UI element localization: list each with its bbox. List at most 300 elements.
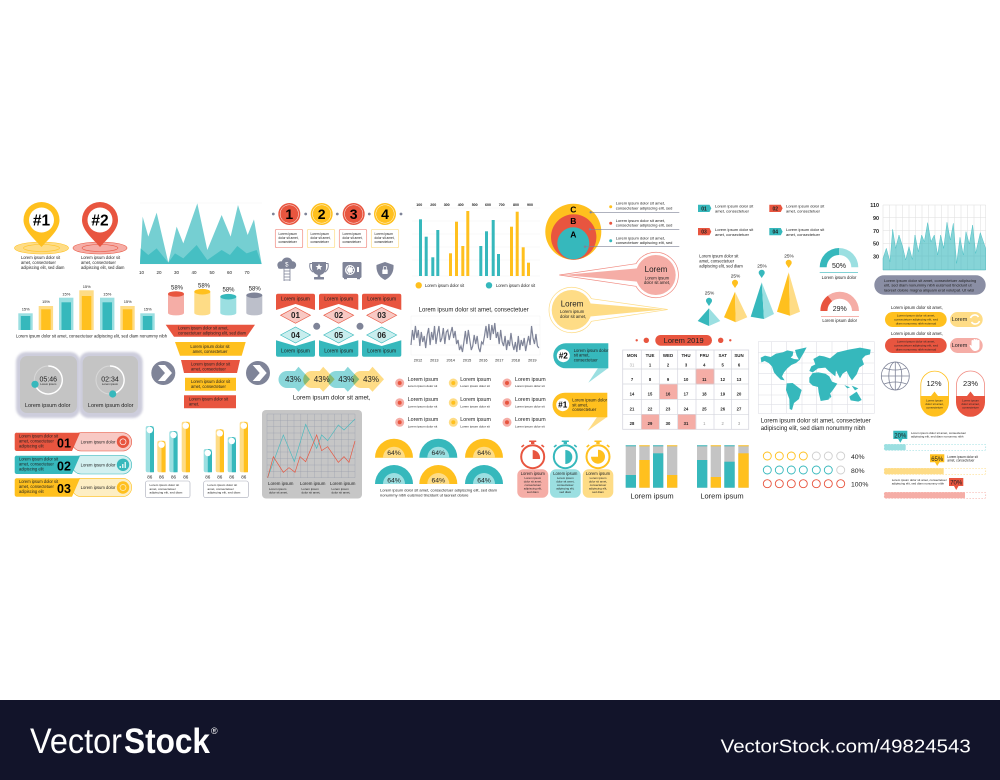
noisy line chart with years: 2012 [414,358,422,362]
thermometer bars group 1: adipiscing elit, sed diam [150,491,183,495]
red header cards: Lorem ipsum [281,296,310,302]
numbered tags 01 to 04: Lorem ipsum dolor sit [715,227,754,232]
half gauges 64 percent: Lorem ipsum dolor sit amet, consectetuer adipiscing elit, sed diam [380,488,498,492]
overlapping arrows 43 percent: 43% [363,375,379,384]
calendar: 14 [630,392,635,396]
area chart 30 to 110: 70 [873,229,879,235]
clock panel 02:34 [79,352,143,418]
half ring gauge 50 percent: Lorem ipsum dolor [822,275,857,280]
gray panel line chart: dolor sit amet, [269,490,288,494]
stopwatch red: Lorem ipsum [524,476,542,480]
numbered text boxes: dolor sit amet, [278,236,299,240]
pin captions: adipiscing elit, sed diam [21,265,65,270]
capsule 23 percent: dolor sit amet, [961,402,980,406]
calendar: 6 [738,362,741,367]
calendar: 26 [720,406,726,412]
noisy line chart with years: 2016 [479,358,488,362]
thermometer bars group 2: Lorem ipsum dolor sit [208,483,237,487]
funnel steps: amet, consectetuer [191,366,226,372]
yellow info pills: Lorem ipsum dolor sit amet, [897,314,935,318]
gray panel line chart: Lorem ipsum [268,481,294,486]
noisy line chart with years: 2014 [446,358,455,362]
speech callout #2 [553,343,609,383]
pyramid chart 25 percent: 25% [705,290,715,296]
stopwatch red: Lorem ipsum [521,471,545,476]
cylinders 58 percent [168,284,262,315]
gray text pill: laoreet dolore magna aliquam erat volutpat. Ut wisi [884,287,974,292]
clock panel 02:34: Lorem ipsum [102,382,119,386]
stacked bars group 2 [697,445,749,500]
progress bar 70 percent [884,478,986,498]
gray panel line chart: dolor sit amet, [302,490,321,494]
list row 02: Lorem ipsum dolor sit [19,456,59,462]
diamond flow 01 to 06: 05 [334,331,344,340]
progress bar 65 percent: amet, consectetuer [947,458,975,462]
yellow balloon callout: dolor sit amet, [560,314,586,319]
world map: Lorem ipsum dolor sit amet, consectetuer [761,418,871,424]
bar chart: 15 percent bars [16,284,168,338]
stopwatch red: sed diam [527,490,539,494]
numbered circles 1 to 4: 2 [318,206,326,222]
numbered circles 1 to 4: 1 [285,206,293,222]
numbered text boxes: dolor sit amet, [374,236,395,240]
bullet list grid: Lorem ipsum dolor sit [515,424,545,428]
bar chart: 15 percent bars: 15% [144,307,152,312]
vertical bar chart 100 to 900: Lorem ipsum dolor sit [425,283,465,288]
funnel steps: Lorem ipsum dolor sit [189,396,229,402]
progress bar 65 percent: Lorem ipsum dolor sit [947,455,978,459]
stopwatch teal: consectetuer [557,483,574,487]
yellow balloon callout: Lorem [561,300,584,308]
capsule 12 percent: consectetuer [926,406,943,410]
capsule 12 percent: dolor sit amet, [925,402,944,406]
bullet list grid: Lorem ipsum [460,397,492,403]
calendar: 30 [666,421,671,426]
calendar: 29 [648,421,653,426]
noisy line chart with years: 2018 [511,358,520,362]
calendar: FRU [700,353,709,358]
vertical bar chart 100 to 900: 300 [444,203,450,207]
nested circles A B C with leaders: Lorem ipsum dolor sit amet, [616,235,665,240]
vertical bar chart 100 to 900: Lorem ipsum dolor sit [496,283,536,288]
pink balloon callout: Lorem [645,265,668,274]
progress bar 70 percent: Lorem ipsum dolor sit amet, consectetuer [892,478,947,482]
world map [758,342,874,432]
thermometer bars group 1: 86 [147,474,153,480]
funnel steps: amet, consectetuer [193,349,228,354]
arrow button 2 [246,361,270,385]
list row 03: amet, consectetuer [19,484,54,489]
yellow info pills: Lorem ipsum dolor sit amet, [891,305,943,310]
clock panel 02:34: Lorem ipsum dolor [88,403,134,409]
red info pills: Lorem [952,343,968,349]
speech callout #1: #1 [558,401,568,410]
capsule 23 percent [956,371,985,417]
vertical bar chart 100 to 900: 600 [485,203,491,207]
calendar: TUE [646,353,654,358]
pyramid chart 25 percent: 25% [731,274,741,280]
calendar: 7 [631,377,634,382]
bar chart: 15 percent bars: 15% [103,292,112,296]
red info pills: diam nonummy nibh euismod [896,347,936,351]
logo wordmark: Stock [124,722,210,761]
pyramid chart 25 percent: 25% [784,254,795,260]
gray panel line chart: Lorem ipsum [332,487,349,491]
pyramid chart 25 percent: 25% [757,264,768,270]
thermometer bars group 1: amet, consectetuer [150,487,176,491]
diamonds [280,307,397,343]
bullet list grid: Lorem ipsum [408,377,439,383]
area chart 30 to 110: 90 [873,216,879,222]
clock panel 02:34: 02:34 [101,376,119,384]
vertical bar chart 100 to 900: 200 [430,203,436,207]
speech callout #1 [553,393,608,431]
diamond flow 01 to 06: 01 [291,311,300,320]
stopwatch yellow [583,440,613,498]
area chart: teal peaks: 30 [174,270,179,275]
calendar: 2 [667,362,670,367]
pyramid chart 25 percent: adipiscing elit, sed diam [699,264,743,268]
calendar: 11 [702,377,707,382]
numbered tags 01 to 04: amet, consectetuer [786,232,821,237]
vertical bar chart 100 to 900: 800 [513,203,519,207]
numbered tags 01 to 04: amet, consectetuer [715,208,750,214]
clock panel 05:46: 05:46 [40,376,57,384]
calendar: 1 [649,362,652,367]
cylinders 58 percent: 58% [171,285,184,291]
yellow info pills: diam nonummy nibh euismod [896,321,936,325]
numbered tags 01 to 04: 03 [701,230,707,236]
thermometer bars group 1: 86 [183,474,189,480]
icon: safe [342,262,362,279]
location pin #2 [73,202,127,254]
noisy line chart with years: 2017 [495,358,504,362]
calendar [623,335,749,429]
list row 01: Lorem ipsum dolor sit [19,434,59,438]
progress bar 70 percent: adipiscing elit, sed diam nonummy nibh [892,482,944,486]
calendar: 13 [737,377,742,382]
ring rating rows: 100% [851,482,868,488]
yellow info pills: consectetuer adipiscing elit, sed [894,318,938,322]
thermometer bars group 2: 86 [217,474,223,480]
list row 02: amet, consectetuer [19,462,54,466]
stopwatch teal: Lorem ipsum [553,471,578,476]
list row 01: Lorem ipsum dolor [81,440,116,444]
speech callout #1: Lorem ipsum dolor [572,398,608,403]
yellow balloon callout [549,287,668,333]
nested circles A B C with leaders: consectetuer adipiscing elit, sed [616,222,672,228]
stopwatch teal: Lorem ipsum [557,476,574,480]
pin captions: Lorem ipsum dolor sit [21,255,61,260]
calendar: 3 [738,421,741,426]
numbered text boxes: Lorem ipsum [278,232,297,236]
half ring gauge 50 percent [820,248,858,280]
calendar title pill: Lorem 2019 [664,336,704,345]
pyramid chart 25 percent [698,254,800,326]
vertical bar chart 100 to 900: 700 [499,203,505,207]
pin captions: Lorem ipsum dolor sit [81,255,121,260]
numbered circles 1 to 4: 4 [381,206,389,222]
stopwatch teal [550,440,581,498]
stopwatch red: dolor sit amet, [524,480,542,484]
calendar: 12 [720,377,726,382]
progress bar 20 percent: 20% [894,433,907,439]
stopwatch yellow: Lorem ipsum [590,476,607,480]
calendar: 25 [702,406,707,412]
calendar: SUN [734,353,744,358]
list row 02: Lorem ipsum dolor [81,462,116,468]
calendar: 18 [702,392,707,396]
bullet list grid: Lorem ipsum dolor sit [408,384,437,388]
ring rating rows: 40% [851,454,865,461]
half gauges 64 percent: 64% [387,450,401,457]
bullet list grid: Lorem ipsum [408,417,439,423]
diamond flow 01 to 06: 02 [334,311,344,320]
list row 02 [15,456,132,474]
gray text pill [874,275,986,295]
pin captions: adipiscing elit, sed diam [81,265,125,270]
vertical bar chart 100 to 900 [412,203,540,288]
stopwatch yellow: consectetuer [590,483,606,487]
cylinders 58 percent: 58% [249,286,261,292]
teal footer cards: Lorem ipsum [324,348,353,354]
nested circles A B C with leaders: Lorem ipsum dolor sit amet, [616,200,665,206]
half gauges 64 percent: 64% [477,477,491,484]
stopwatch cards [517,440,613,498]
noisy line chart with years: 2013 [430,358,439,362]
logo wordmark [30,722,218,761]
stopwatch yellow: dolor sit amet, [589,480,607,484]
noisy line chart with years [411,308,540,362]
list row 03: 03 [57,482,71,496]
speech callout #1: sit amet, [572,402,588,407]
calendar: 10 [684,377,689,382]
nested circles A B C with leaders [545,200,679,260]
teal footer cards: Lorem ipsum [367,348,396,354]
bullet list grid: Lorem ipsum [515,377,546,383]
bar chart: 15 percent bars: 15% [22,307,30,312]
nested circles A B C with leaders: Lorem ipsum dolor sit amet, [616,218,665,223]
bullet list grid: Lorem ipsum dolor sit [515,405,545,409]
pyramid chart 25 percent: Lorem ipsum dolor sit [699,254,739,258]
footer image id: VectorStock.com/49824543 [721,736,971,756]
arrow button 1 [151,361,175,385]
progress bar 20 percent: Lorem ipsum dolor sit amet, consectetuer [911,431,966,435]
stopwatch yellow: Lorem ipsum [586,471,611,476]
bar chart: 15 percent bars: Lorem ipsum dolor sit amet, consectetuer adipiscing elit, sed diam nonummy nibh [16,334,168,338]
list row 03 [15,478,132,497]
numbered text boxes: dolor sit amet, [342,236,363,240]
icon: trophy [310,262,328,280]
gray panel line chart: Lorem ipsum [330,481,356,486]
half gauges 64 percent: 64% [387,477,401,484]
calendar: 24 [684,406,689,412]
numbered text boxes: Lorem ipsum [310,232,329,236]
half gauges 64 percent: nonummy nibh euismod tincidunt ut laoreet dolore [380,492,469,497]
clock panel 05:46 [16,352,80,418]
numbered tags 01 to 04: amet, consectetuer [715,232,750,237]
gray panel line chart: dolor sit amet, [332,490,351,494]
red info pills [885,331,983,353]
calendar: 20 [737,392,742,396]
bullet list grid: Lorem ipsum [515,417,546,423]
list row 03: Lorem ipsum dolor sit [19,479,59,484]
world map: adipiscing elit, sed diam nonummy nibh [761,426,865,432]
list row 01: amet, consectetuer [19,438,54,444]
speech callout #2: sit amet, [574,353,590,358]
clock panel 05:46: Lorem ipsum [40,382,57,386]
icon: money cloud with ladder: $ [285,262,289,268]
red header cards [276,294,401,310]
thermometer bars group 1: Lorem ipsum dolor sit [150,483,179,487]
numbered text boxes: consectetuer [310,240,330,244]
list row 02: adipiscing elit [19,466,44,472]
progress bar 65 percent: 65% [931,457,944,463]
stopwatch red [517,440,548,498]
numbered tags 01 to 04: Lorem ipsum dolor sit [786,204,825,208]
area chart 30 to 110: 110 [870,203,879,209]
capsule 23 percent: Lorem ipsum [962,398,979,402]
bullet list grid: Lorem ipsum dolor sit [460,384,490,388]
pin captions: amet, consectetuer [81,260,116,265]
thermometer bars group 2 [204,422,248,498]
calendar: 4 [703,362,706,367]
nested circles A B C with leaders: A [570,230,576,240]
numbered text boxes: dolor sit amet, [310,236,331,240]
area chart: teal peaks: 70 [244,270,250,275]
calendar: 1 [703,421,706,426]
logo wordmark: Vector [30,722,122,761]
half ring gauge 29 percent: 29% [833,306,847,313]
thermometer bars group 1: 86 [171,474,176,480]
numbered text boxes: consectetuer [278,240,298,244]
area chart: teal peaks: 50 [209,270,215,275]
gray panel line chart [262,410,362,498]
area chart 30 to 110: 30 [873,254,879,260]
calendar: 27 [737,406,742,412]
list row 01 [15,433,132,451]
gray text pill: elit, sed diam nonummy nibh euismod tincidunt ut [884,283,972,288]
diamond flow 01 to 06 [276,294,401,357]
pink balloon callout: dolor sit amet, [644,280,670,285]
footer banner [0,700,1000,780]
overlapping arrows 43 percent: 43% [338,375,354,384]
pin captions: amet, consectetuer [21,260,56,265]
logo wordmark: ® [211,726,218,736]
numbered circles 1 to 4: 3 [350,206,358,222]
overlapping arrows 43 percent [278,367,384,402]
thermometer bars group 2: 86 [205,474,211,480]
capsule 23 percent: 23% [963,379,978,388]
half gauges 64 percent [375,439,503,497]
half gauges 64 percent: 64% [431,477,445,484]
capsule 23 percent: consectetuer [962,406,979,410]
area chart: teal peaks [139,203,262,275]
bullet list grid: Lorem ipsum dolor sit [408,424,437,428]
calendar: 3 [685,362,688,367]
stacked bars group 1: Lorem ipsum [630,491,674,500]
clock panel 05:46: Lorem ipsum dolor [25,403,71,409]
speech callout #2: consectetuer [574,357,598,362]
nested circles A B C with leaders: consectetuer adipiscing elit, sed [616,240,672,245]
capsule 12 percent: 12% [926,379,942,388]
stacked bars group 1 [626,445,677,500]
noisy line chart with years: 2015 [463,358,471,362]
yellow balloon callout: Lorem ipsum [560,309,585,314]
thermometer bars group 1: 86 [159,474,164,480]
numbered text boxes: Lorem ipsum [342,232,361,236]
bar chart: 15 percent bars: 15% [83,284,91,289]
vertical bar chart 100 to 900: 400 [458,203,464,207]
pin captions [21,255,125,270]
numbered tags 01 to 04: Lorem ipsum dolor sit [715,204,754,208]
yellow info pills: Lorem [952,317,968,323]
overlapping arrows 43 percent: 43% [285,375,301,384]
calendar: MON [627,353,637,358]
speech callout #2: #2 [559,352,568,361]
stopwatch red: adipiscing elit, [524,486,542,490]
half gauges 64 percent: 64% [431,450,445,457]
diamond flow 01 to 06: 06 [377,331,387,340]
bullet list grid: Lorem ipsum dolor sit [460,424,490,428]
calendar: 2 [722,421,725,426]
numbered tags 01 to 04: 01 [701,206,707,212]
progress bar 65 percent [884,454,986,474]
funnel steps: Lorem ipsum dolor sit [191,362,231,366]
teal footer cards: Lorem ipsum [281,348,310,354]
numbered text boxes: consectetuer [374,240,394,244]
bullet list grid: Lorem ipsum dolor sit [408,405,437,409]
numbered tags 01 to 04 [698,204,825,237]
area chart: teal peaks: 10 [139,270,144,275]
funnel steps: Lorem ipsum dolor sit [190,344,230,349]
location pin #1 [14,202,68,254]
red header cards: Lorem ipsum [324,296,353,302]
nested circles A B C with leaders: B [570,216,576,226]
red info pills: Lorem ipsum dolor sit amet, [897,340,935,344]
funnel steps: Lorem ipsum dolor sit amet, [178,326,229,331]
funnel steps: amet. [189,402,199,406]
teal footer cards [276,340,401,357]
thermometer bars group 2: 86 [229,474,235,480]
thermometer bars group 2: 86 [241,474,247,480]
bar chart: 15 percent bars: 15% [124,299,132,304]
calendar: 5 [722,362,725,367]
half gauges 64 percent: 64% [477,450,491,457]
pyramid chart 25 percent: amet, consectetuer [699,258,735,264]
vertical bar chart 100 to 900: 900 [527,203,533,207]
area chart: teal peaks: 40 [191,270,197,275]
icon: money cloud with ladder [277,258,296,281]
calendar: 21 [630,406,635,412]
capsule 12 percent: Lorem ipsum [926,398,943,402]
noisy line chart with years: Lorem ipsum dolor sit amet, consectetuer [419,308,529,314]
stopwatch teal: dolor sit amet, [556,480,575,484]
list row 02: 02 [57,460,71,474]
progress bar 20 percent [884,431,986,450]
calendar: WED [663,353,673,358]
numbered text boxes: consectetuer [342,240,362,244]
bar chart: 15 percent bars: 15% [42,299,50,304]
calendar: 22 [648,406,653,412]
half ring gauge 50 percent: 50% [832,263,846,270]
red info pills: Lorem ipsum dolor sit amet, [891,331,943,336]
stopwatch yellow: sed diam [592,490,604,494]
funnel steps: Lorem ipsum dolor sit [191,379,231,384]
vertical bar chart 100 to 900: 100 [416,203,422,207]
calendar: SAT [718,353,727,358]
stopwatch teal: sed diam [559,490,572,494]
